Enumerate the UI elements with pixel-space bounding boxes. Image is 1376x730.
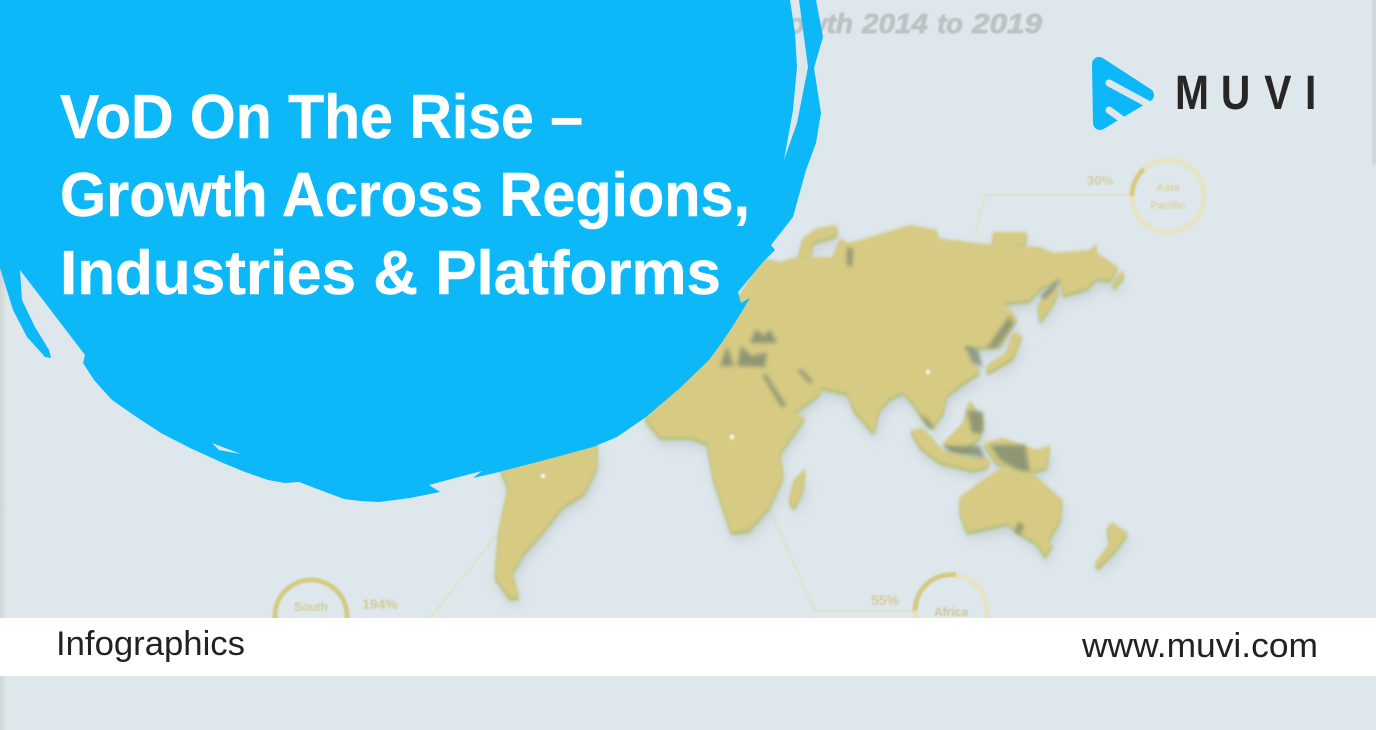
Arctic islands [993, 232, 1027, 245]
Borneo and Philippines [943, 400, 983, 452]
blurred heading behind the blob: Growth [755, 8, 853, 39]
map markers [540, 370, 930, 478]
blurred heading behind the blob [755, 8, 1042, 39]
Australia [960, 467, 1062, 557]
white sliver in the blob [212, 443, 241, 454]
title line 1: VoD On The Rise – [60, 83, 583, 152]
ring: Africa [871, 575, 987, 647]
New Zealand [1095, 522, 1128, 568]
Eurasia and Africa [640, 225, 1118, 532]
blurred heading behind the blob: to [937, 8, 963, 39]
green coastal fringe [495, 228, 1128, 601]
Japan [987, 332, 1022, 373]
blue paint blob [0, 0, 823, 502]
Kuril tip [1112, 270, 1124, 288]
ring: Asia Pacific [1087, 160, 1204, 232]
connector lines [430, 195, 1130, 618]
Sumatra and Java [910, 428, 990, 470]
ring: Asia Pacific: 30% [1087, 173, 1113, 188]
soft map shadow [497, 233, 1130, 606]
ring: Africa: Africa [934, 605, 968, 619]
logo icon [1099, 64, 1148, 123]
ring: South America [275, 580, 398, 652]
logo wordmark: MUVI [1175, 67, 1316, 120]
Madagascar [789, 468, 805, 508]
ring: South America: South [294, 600, 328, 614]
ring: Asia Pacific: Pacific [1150, 200, 1186, 212]
logo [1099, 64, 1316, 123]
title [60, 83, 750, 308]
blurred heading behind the blob: 2014 [861, 8, 928, 39]
dark inland seas and coastal shading [720, 247, 1060, 535]
blurred heading behind the blob: 2019 [971, 8, 1042, 39]
title line 3: Industries & Platforms [60, 239, 721, 308]
label: Infographics: Infographics [56, 625, 245, 663]
South America [495, 440, 597, 598]
ring: Africa: 55% [871, 592, 900, 608]
title line 2: Growth Across Regions, [60, 161, 750, 230]
ring: South America: 194% [362, 596, 398, 612]
world map [495, 225, 1128, 598]
ring: Asia Pacific: Asia [1156, 182, 1180, 194]
right scroll indicator [1372, 0, 1376, 165]
bottom white bar [0, 618, 1376, 676]
label: website: www.muvi.com [1081, 627, 1318, 665]
New Guinea [983, 438, 1050, 473]
Novaya Zemlya [798, 225, 837, 257]
Sakhalin [1038, 288, 1060, 322]
left edge shade [0, 0, 8, 730]
